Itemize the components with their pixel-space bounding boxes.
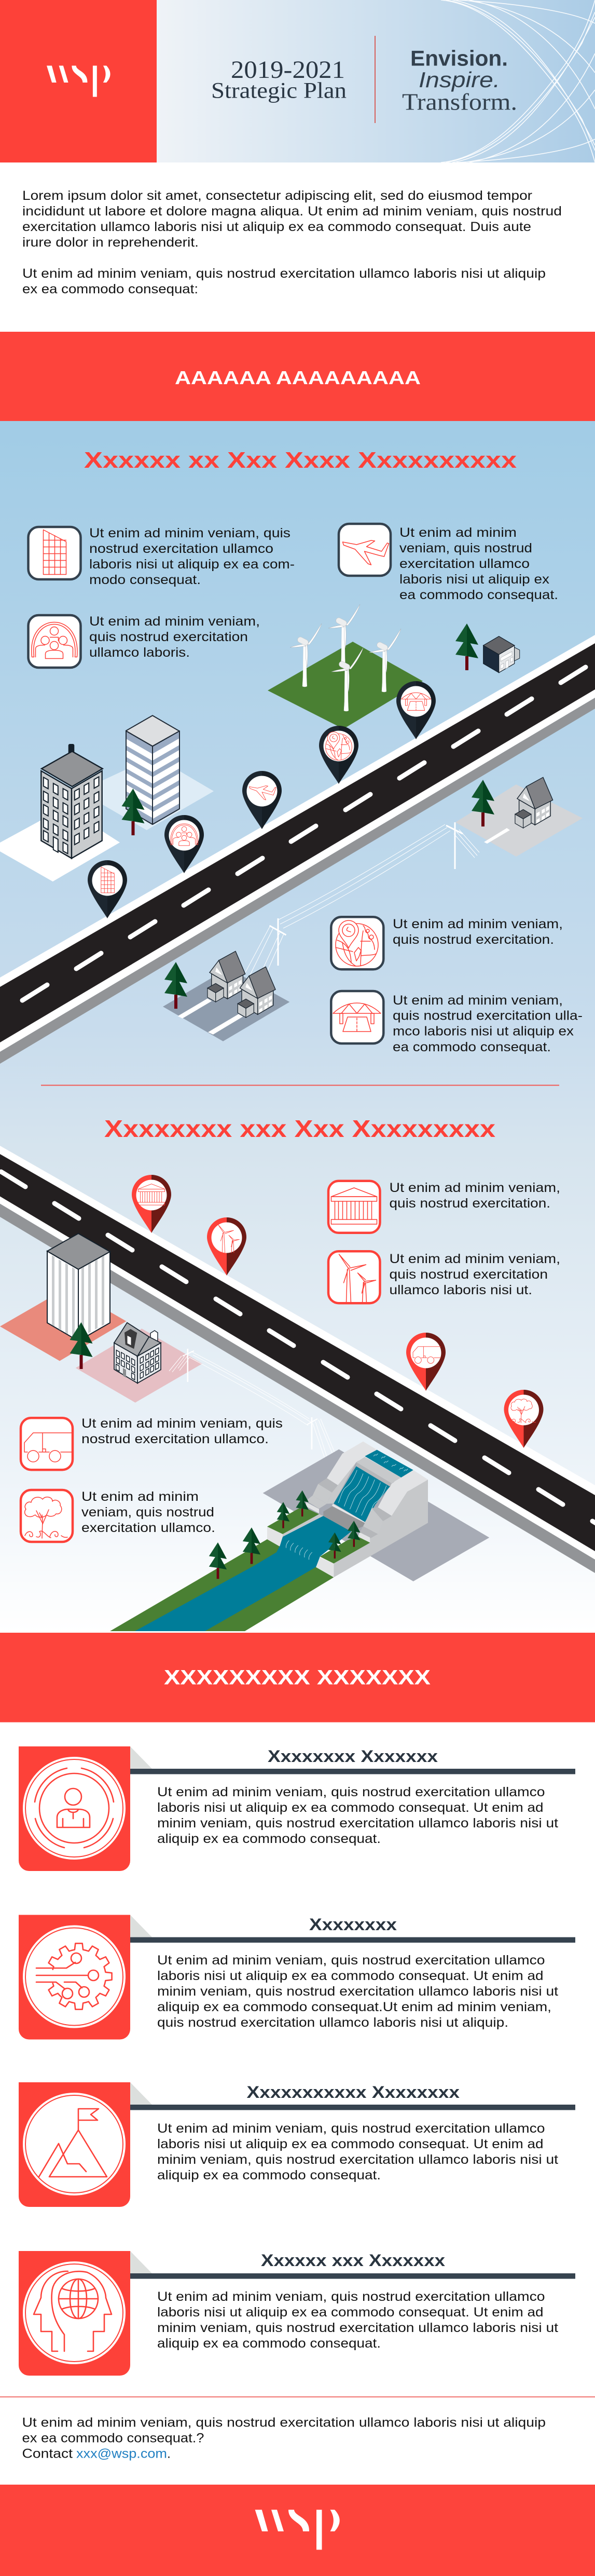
legend item: globe: Ut enim ad minim veniam,	[393, 917, 563, 931]
card three text: laboris nisi ut aliquip ex ea commodo consequat. Ut enim ad	[157, 2137, 544, 2151]
power lines one	[245, 822, 479, 975]
legend item: bridge: Ut enim ad minim veniam,	[393, 993, 563, 1008]
tagline: Inspire.	[419, 67, 500, 92]
legend item: tree and waves	[21, 1489, 215, 1542]
pin: people	[164, 815, 204, 873]
pink plate and townhouse	[76, 1323, 202, 1403]
card two text	[157, 1953, 558, 2030]
card one text: laboris nisi ut aliquip ex ea commodo consequat. Ut enim ad	[157, 1800, 544, 1815]
legend item: tree and waves: veniam, quis nostrud	[81, 1505, 214, 1520]
contact text: Ut enim ad minim veniam, quis nostrud exercitation ullamco laboris nisi ut aliquip	[22, 2415, 546, 2430]
card one text	[157, 1785, 558, 1846]
legend item: plane	[339, 524, 558, 602]
card: gear	[19, 1915, 575, 2039]
card two text: minim veniam, quis nostrud exercitation ullamco laboris nisi ut	[157, 1984, 558, 1999]
card four text: minim veniam, quis nostrud exercitation ullamco laboris nisi ut	[157, 2321, 558, 2335]
card four text: aliquip ex ea commodo consequat.	[157, 2336, 381, 2351]
legend item: tree and waves: Ut enim ad minim	[81, 1489, 199, 1504]
card four text: Ut enim ad minim veniam, quis nostrud exercitation ullamco	[157, 2289, 545, 2304]
icon: mountain with flag	[39, 2109, 107, 2177]
legend item: bridge: mco laboris nisi ut aliquip ex	[393, 1024, 574, 1038]
legend item: truck: nostrud exercitation ullamco.	[81, 1432, 269, 1446]
tagline: Transform.	[402, 88, 517, 115]
legend item: museum: Ut enim ad minim veniam,	[389, 1181, 560, 1195]
wind farm	[268, 604, 423, 729]
header banner	[0, 0, 595, 162]
legend item: building: Ut enim ad minim veniam, quis	[89, 526, 290, 540]
contact text: ex ea commodo consequat.?	[22, 2431, 204, 2445]
footer rule	[0, 2396, 595, 2397]
power lines two	[169, 1349, 336, 1461]
city plates	[0, 756, 214, 882]
band two heading: XXXXXXXXX XXXXXXX	[164, 1666, 431, 1689]
WSP logo	[47, 65, 110, 97]
legend item: people: Ut enim ad minim veniam,	[89, 614, 260, 629]
card four text	[157, 2289, 558, 2351]
section one title: Xxxxxx xx Xxx Xxxx Xxxxxxxxxx	[84, 448, 517, 473]
striped tower	[126, 715, 179, 824]
card four text: laboris nisi ut aliquip ex ea commodo consequat. Ut enim ad	[157, 2305, 544, 2320]
spillway	[334, 1466, 390, 1522]
legend item: plane: laboris nisi ut aliquip ex	[399, 572, 550, 587]
contact text: .	[167, 2446, 171, 2461]
legend item: truck	[21, 1416, 283, 1470]
red section band two	[0, 1633, 595, 1723]
card three text	[157, 2121, 558, 2182]
footer WSP logo	[255, 2510, 340, 2550]
plan title: Strategic Plan	[211, 79, 347, 103]
tagline: Envision.	[410, 46, 508, 71]
intro text: irure dolor in reprehenderit.	[22, 235, 199, 250]
red section band one	[0, 332, 595, 421]
legend item: museum	[328, 1181, 560, 1233]
legend item: wind turbines: quis nostrud exercitation	[389, 1267, 548, 1282]
card one text: Ut enim ad minim veniam, quis nostrud exercitation ullamco	[157, 1785, 545, 1799]
band one heading: AAAAAA AAAAAAAAA	[175, 367, 421, 388]
header gradient panel	[157, 0, 595, 162]
card three text: minim veniam, quis nostrud exercitation ullamco laboris nisi ut	[157, 2152, 558, 2167]
intro text: incididunt ut labore et dolore magna aliqua. Ut enim ad minim veniam, quis nostrud	[22, 204, 562, 219]
river banks	[110, 1539, 334, 1631]
card one heading: Xxxxxxxx Xxxxxxx	[268, 1747, 438, 1766]
pin: globe	[319, 726, 358, 784]
pin: plane	[242, 771, 282, 829]
pins along road two	[132, 1175, 544, 1448]
plan title	[211, 56, 347, 103]
left bank block	[283, 1514, 323, 1537]
card two text: quis nostrud exercitation ullamco laboris nisi ut aliquip.	[157, 2015, 508, 2030]
pin: bridge	[396, 681, 436, 739]
section two tree	[70, 1322, 92, 1369]
water lines	[286, 1454, 408, 1560]
decorative curves	[441, 0, 595, 162]
legend item: globe	[331, 917, 563, 969]
legend item: plane: Ut enim ad minim	[399, 525, 517, 540]
sky background panel	[0, 421, 595, 1633]
intro text: exercitation ullamco laboris nisi ut aliquip ex ea commodo consequat. Duis aute	[22, 220, 531, 234]
card one text: minim veniam, quis nostrud exercitation ullamco laboris nisi ut	[157, 1816, 558, 1831]
road one	[0, 635, 595, 1064]
legend item: building	[28, 526, 295, 587]
card: people	[19, 1746, 575, 1871]
card one text: aliquip ex ea commodo consequat.	[157, 1832, 381, 1846]
city tree	[121, 789, 144, 835]
dam trees	[209, 1490, 361, 1579]
river water	[135, 1516, 351, 1631]
intro text	[22, 188, 562, 296]
contact text: Contact	[22, 2446, 73, 2461]
legend item: wind turbines: ullamco laboris nisi ut.	[389, 1283, 532, 1297]
legend item: building: laboris nisi ut aliquip ex ea com-	[89, 557, 295, 572]
legend item: people	[28, 614, 260, 668]
pin: building	[88, 860, 127, 918]
card three text: Ut enim ad minim veniam, quis nostrud exercitation ullamco	[157, 2121, 545, 2136]
card two text: aliquip ex ea commodo consequat.Ut enim ad minim veniam,	[157, 2000, 551, 2014]
hydro dam and river	[110, 1442, 489, 1631]
contact text: xxx@wsp.com	[76, 2446, 167, 2461]
card three heading: Xxxxxxxxxxx Xxxxxxxx	[247, 2083, 460, 2102]
pin: museum	[132, 1175, 171, 1233]
icon: gear with circuit	[36, 1943, 112, 2010]
legend item: bridge: ea commodo consequat.	[393, 1040, 551, 1054]
legend item: bridge: quis nostrud exercitation ulla-	[393, 1008, 583, 1023]
vertical divider	[375, 36, 376, 123]
legend item: wind turbines: Ut enim ad minim veniam,	[389, 1252, 560, 1266]
pin: truck	[406, 1333, 446, 1391]
card two heading: Xxxxxxxx	[309, 1915, 397, 1934]
legend item: plane: veniam, quis nostrud	[399, 541, 532, 555]
legend item: building: nostrud exercitation ullamco	[89, 541, 273, 556]
grey apartment block	[41, 744, 103, 858]
card four heading: Xxxxxx xxx Xxxxxxx	[261, 2251, 445, 2270]
white strip under river	[0, 1631, 595, 1633]
road two	[0, 1146, 595, 1573]
card three text: aliquip ex ea commodo consequat.	[157, 2168, 381, 2182]
legend item: museum: quis nostrud exercitation.	[389, 1196, 550, 1211]
contact text	[22, 2415, 546, 2461]
legend item: truck: Ut enim ad minim veniam, quis	[81, 1416, 283, 1431]
card two text: Ut enim ad minim veniam, quis nostrud exercitation ullamco	[157, 1953, 545, 1968]
intro text: Lorem ipsum dolor sit amet, consectetur adipiscing elit, sed do eiusmod tempor	[22, 188, 532, 203]
plan title: 2019-2021	[231, 56, 345, 84]
card two text: laboris nisi ut aliquip ex ea commodo consequat. Ut enim ad	[157, 1969, 544, 1983]
icon: head with globe	[34, 2271, 112, 2351]
pins along road one	[88, 681, 436, 918]
twin houses plot	[163, 951, 289, 1041]
icon: person in rings	[35, 1768, 114, 1848]
pin: tree	[504, 1390, 544, 1448]
legend item: bridge	[331, 991, 583, 1054]
dam body	[334, 1480, 428, 1577]
legend item: people: ullamco laboris.	[89, 645, 190, 660]
section two title: Xxxxxxxx xxx Xxx Xxxxxxxxx	[104, 1115, 495, 1142]
card: mountain	[19, 2082, 575, 2207]
tagline	[402, 46, 517, 115]
legend item: plane: ea commodo consequat.	[399, 588, 558, 602]
legend item: building: modo consequat.	[89, 573, 201, 587]
footer band	[0, 2485, 595, 2576]
right bank block	[316, 1557, 334, 1577]
east house plot	[455, 777, 583, 857]
tree and small building	[455, 623, 520, 673]
card: head and globe	[19, 2251, 575, 2376]
gray plot	[263, 1449, 489, 1581]
intro text: ex ea commodo consequat:	[22, 282, 198, 296]
legend item: wind turbines	[328, 1251, 560, 1303]
pin: wind turbines	[207, 1217, 246, 1276]
salmon plate and white tower	[0, 1233, 127, 1361]
legend item: people: quis nostrud exercitation	[89, 630, 248, 644]
section divider line	[41, 1085, 559, 1086]
intro text: Ut enim ad minim veniam, quis nostrud exercitation ullamco laboris nisi ut aliquip	[22, 266, 546, 281]
legend item: plane: exercitation ullamco	[399, 557, 530, 571]
red logo panel	[0, 0, 157, 162]
legend item: globe: quis nostrud exercitation.	[393, 932, 554, 947]
legend item: tree and waves: exercitation ullamco.	[81, 1521, 215, 1535]
